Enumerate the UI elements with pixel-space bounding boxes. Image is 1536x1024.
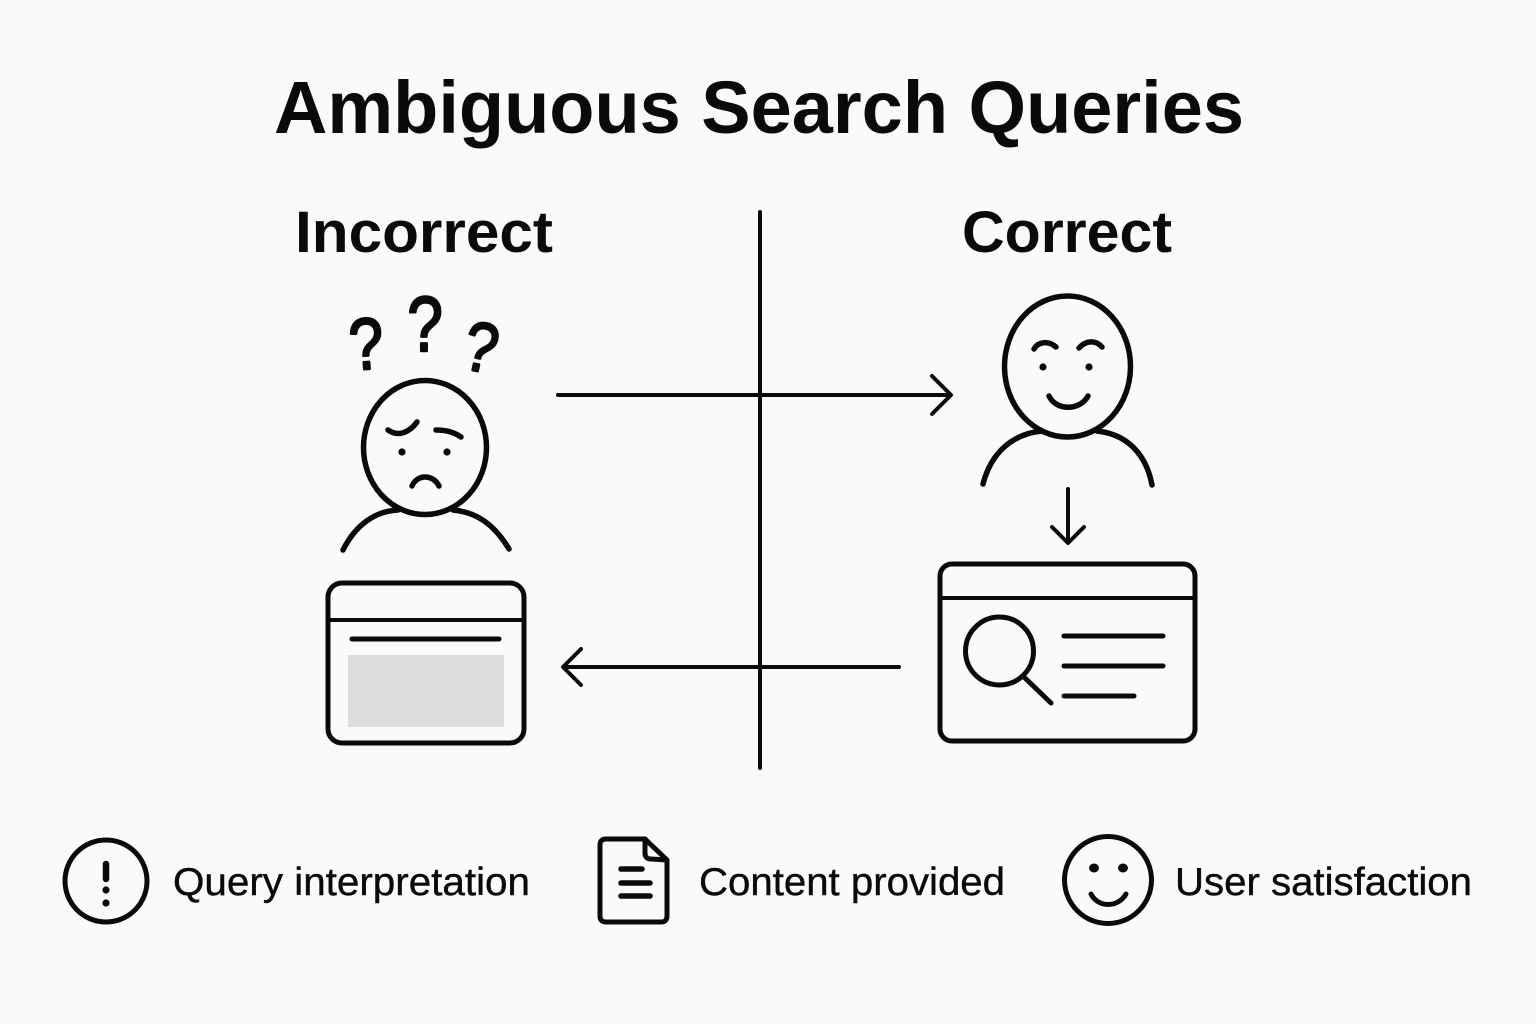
legend: query interpretation	[65, 840, 530, 922]
icon: smiley	[1064, 836, 1152, 924]
arrow: user to search results	[1052, 489, 1084, 543]
heading: incorrect: Incorrect	[295, 200, 553, 265]
icon: browser window with search results	[940, 564, 1195, 741]
vertical divider	[758, 212, 762, 768]
arrow: correct to incorrect	[563, 649, 899, 685]
icon: exclamation circle	[65, 840, 147, 922]
icon: question marks: ?	[457, 305, 505, 389]
icon: happy user	[983, 296, 1152, 485]
icon: browser window with empty content	[328, 583, 524, 743]
arrow: incorrect to correct	[558, 376, 951, 414]
icon: document	[600, 839, 667, 922]
icon: question marks	[346, 281, 505, 389]
legend: content provided	[600, 839, 1005, 922]
label: User satisfaction	[1175, 861, 1472, 904]
label: Query interpretation	[173, 861, 530, 904]
icon: confused user	[343, 380, 509, 550]
title: Ambiguous Search Queries	[274, 66, 1244, 149]
legend: user satisfaction	[1064, 836, 1472, 924]
icon: question marks: ?	[407, 281, 443, 368]
icon: question marks: ?	[346, 303, 386, 386]
heading: correct: Correct	[962, 200, 1172, 265]
label: Content provided	[699, 861, 1005, 904]
